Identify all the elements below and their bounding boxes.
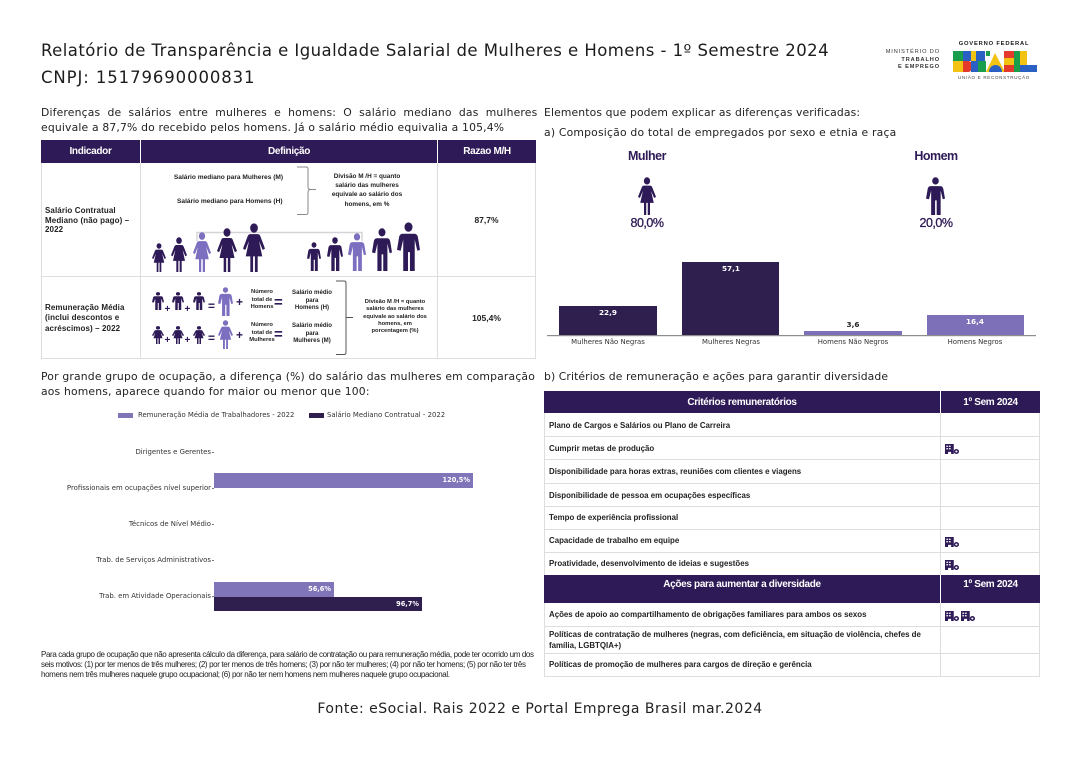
logo: governo federal: UNIÃO E RECONSTRUÇÃO (958, 75, 1030, 80)
logo: ministério: MINISTÉRIO DO (886, 49, 940, 55)
bar: Mulheres Negras: 57,1 (722, 264, 740, 273)
value: 20,0%: 20,0% (920, 216, 952, 230)
value: 87,7%: 87,7% (474, 215, 499, 225)
icon: mulher (638, 177, 656, 215)
text: divisão M/H porcentagem: porcentagem (%) (371, 328, 419, 334)
legend: Salário Mediano Contratual - 2022 (327, 411, 445, 419)
text: diferenças de salários: equivale a 87,7% do recebido pelos homens. Já o salário médio equivalia a 105,4% (41, 121, 504, 134)
label: homem: Homem (914, 149, 958, 163)
text: diferenças de salários: Diferenças de salários entre mulheres e homens: O salário mediano das mulheres (41, 106, 537, 119)
bar: Homens Não Negros: 3,6 (847, 320, 859, 329)
header: critérios: Critérios remuneratórios (687, 396, 797, 408)
row label: salário contratual: 2022 (45, 225, 63, 234)
row: capacidade de trabalho: Capacidade de trabalho em equipe (549, 536, 679, 545)
row label: salário contratual: Mediano (não pago) – (45, 216, 129, 225)
text: divisão M/H porcentagem: homens, em (378, 321, 412, 327)
equals 1: = (274, 294, 283, 311)
icons: soma homens: = (208, 299, 215, 313)
row: cumprir metas: Cumprir metas de produção (549, 444, 654, 453)
logo: ministério: E EMPREGO (898, 64, 940, 70)
bar chart: grupos de ocupação (67, 448, 473, 611)
value: 105,4%: 105,4% (472, 313, 501, 323)
text: número total de mulheres: Número (251, 322, 273, 328)
logo: governo federal: GOVERNO FEDERAL (959, 41, 1029, 47)
heading: a) composição: a) Composição do total de empregados por sexo e etnia e raça (544, 126, 896, 139)
axis labels: Homens Negros (948, 338, 1003, 346)
row label: salário contratual: Salário Contratual (45, 206, 116, 215)
label: mulher: Mulher (628, 149, 666, 163)
axis labels: Homens Não Negros (818, 338, 889, 346)
bar: Homens Negros: 16,4 (966, 317, 984, 326)
equals 2: = (274, 326, 283, 343)
row: tempo de experiência: Tempo de experiência profissional (549, 513, 678, 522)
icons: soma homens: + (184, 304, 190, 315)
bar: 56,6%: 56,6% (308, 585, 331, 593)
title: Relatório de Transparência e Igualdade Salarial de Mulheres e Homens - 1º Semestre 2024 (41, 41, 829, 60)
text: divisão M/H porcentagem: Divisão M /H = quanto (365, 299, 425, 305)
icons: soma homens (152, 287, 243, 316)
footnote: homens nem três mulheres naquele grupo ocupacional; (6) por não ter nem homens nem mulheres naquele grupo ocupacional. (41, 670, 450, 679)
icons: soma mulheres: + (164, 335, 170, 346)
title (41, 41, 829, 87)
table header: Razao M/H (463, 146, 511, 157)
bar chart: grupos de ocupação: Trab. em Atividade Operacionais (99, 592, 211, 600)
row: políticas de contratação (549, 630, 921, 650)
text: número total de mulheres: total de (252, 330, 272, 336)
header: ações: 1º Sem 2024 (963, 579, 1018, 590)
icon: empresa (945, 537, 959, 547)
bar chart: grupos de ocupação: Trab. de Serviços Administrativos (96, 556, 211, 564)
title: CNPJ: 15179690000831 (41, 68, 255, 87)
text: por grande grupo de ocupação (41, 370, 535, 398)
text: divisão M/H (332, 173, 402, 208)
row: proatividade: Proatividade, desenvolvimento de ideias e sugestões (549, 559, 749, 568)
axis labels: Mulheres Negras (702, 338, 760, 346)
legend: Remuneração Média de Trabalhadores - 2022 (138, 411, 294, 419)
row label: salário contratual (45, 206, 129, 234)
bar: Homens Não Negros (804, 320, 902, 336)
heading: b) critérios: b) Critérios de remuneração e ações para garantir diversidade (544, 370, 888, 383)
bar: Mulheres Não Negras (559, 306, 657, 336)
text: diferenças de salários (41, 106, 537, 134)
table header: Definição (268, 146, 310, 157)
text: por grande grupo de ocupação: Por grande grupo de ocupação, a diferença (%) do salário das mulheres em comparação (41, 370, 535, 383)
icons: soma mulheres: + (236, 328, 243, 342)
text: divisão M/H porcentagem: salário das mulheres (366, 306, 424, 312)
value: 80,0%: 80,0% (631, 216, 663, 230)
brace 1 (297, 166, 316, 215)
text: divisão M/H: homens, em % (345, 201, 389, 208)
text: divisão M/H porcentagem (363, 299, 427, 334)
icons: homens (307, 222, 420, 271)
row: políticas de contratação: família, LGBTQIA+) (549, 640, 621, 650)
row: políticas de promoção: Políticas de promoção de mulheres para cargos de direção e gerência (549, 660, 812, 669)
text: número total de homens: Homens (251, 304, 273, 310)
logo: governo federal (953, 41, 1037, 80)
text: número total de mulheres: Mulheres (249, 337, 275, 343)
row label: remuneração média: acréscimos) – 2022 (45, 324, 120, 333)
icon: empresa (945, 444, 959, 454)
panel: tabela de indicadores (41, 140, 536, 359)
heading: elementos: Elementos que podem explicar as diferenças verificadas: (544, 106, 860, 119)
fonte: Fonte: eSocial. Rais 2022 e Portal Emprega Brasil mar.2024 (317, 701, 763, 717)
row label: remuneração média (45, 303, 125, 333)
icon: homem (926, 177, 945, 215)
text: número total de homens (251, 289, 274, 310)
icons: empresa dupla (945, 611, 975, 621)
table header: Indicador (69, 146, 112, 157)
row: ações de apoio: Ações de apoio ao compartilhamento de obrigações familiares para ambos os sexos (549, 610, 866, 619)
text: salário médio mulheres: Salário médio (292, 322, 332, 329)
text: divisão M/H porcentagem: equivale ao salário dos (363, 314, 427, 320)
footnote (41, 650, 534, 679)
axis labels (571, 338, 1003, 346)
icon: empresa (945, 560, 959, 570)
row label: remuneração média: (inclui descontos e (45, 313, 119, 322)
text: divisão M/H: Divisão M /H = quanto (334, 173, 400, 180)
footnote: seis motivos: (1) por ter menos de três mulheres; (2) por ter menos de três homens; (3) por não ter mulheres; (4) por não ter homens; (5) por não ter três (41, 660, 526, 669)
header: ações (544, 575, 1040, 603)
axis labels: Mulheres Não Negras (571, 338, 645, 346)
row: políticas de contratação: Políticas de contratação de mulheres (negras, com deficiência, em situação de violência, chefes de (549, 630, 921, 639)
panel: critérios e ações (544, 391, 1040, 677)
header: critérios (544, 391, 1040, 413)
bar chart: empregados por sexo e raça (547, 262, 1036, 346)
row: disponibilidade horas extras: Disponibilidade para horas extras, reuniões com clientes e viagens (549, 467, 801, 476)
bar: 120,5%: 120,5% (443, 476, 470, 484)
footnote: Para cada grupo de ocupação que não apresenta cálculo da diferença, para salário de contratação ou para remuneração média, pode ter ocorrido um dos (41, 650, 534, 659)
icons: soma mulheres: + (184, 335, 190, 346)
label: salário mediano homens: Salário mediano para Homens (H) (177, 198, 283, 205)
bar: Homens Negros (927, 315, 1024, 336)
bar: Mulheres Negras (682, 262, 779, 336)
icons: soma homens: + (236, 295, 243, 309)
icons: soma mulheres: = (208, 331, 215, 345)
text: salário médio homens: Homens (H) (295, 304, 329, 311)
bar: 120,5% (214, 473, 473, 488)
logo: ministério (886, 48, 940, 70)
header: critérios: 1º Sem 2024 (963, 396, 1018, 408)
bar: 96,7%: 96,7% (396, 600, 419, 608)
header: ações: Ações para aumentar a diversidade (663, 579, 821, 590)
bar: Mulheres Não Negras: 22,9 (599, 308, 617, 317)
text: por grande grupo de ocupação: aos homens, aparece quando for maior ou menor que 100: (41, 385, 370, 398)
icons: soma mulheres (152, 320, 243, 349)
brace 2 (336, 280, 353, 355)
row: plano de cargos: Plano de Cargos e Salários ou Plano de Carreira (549, 421, 730, 430)
text: divisão M/H: equivale ao salário dos (332, 191, 402, 198)
text: salário médio homens: Salário médio (292, 289, 332, 296)
logo: ministério: TRABALHO (901, 56, 940, 62)
bar: 56,6% (214, 582, 334, 597)
bar chart: grupos de ocupação: Técnicos de Nível Médio (129, 520, 211, 528)
text: salário médio homens: para (306, 297, 318, 304)
icons: soma homens: + (164, 304, 170, 315)
row label: remuneração média: Remuneração Média (45, 303, 125, 312)
text: número total de homens: Número (251, 289, 273, 295)
category labels: Dirigentes e Gerentes (136, 448, 211, 456)
text: salário médio mulheres: para (306, 330, 318, 337)
row: disponibilidade de pessoa: Disponibilidade de pessoa em ocupações específicas (549, 491, 750, 500)
text: salário médio mulheres: Mulheres (M) (293, 337, 331, 344)
bar: 96,7% (214, 597, 422, 611)
text: número total de mulheres (249, 322, 275, 343)
bar chart: grupos de ocupação: Profissionais em ocupações nível superior (67, 484, 211, 492)
icons: mulheres (152, 223, 265, 272)
text: divisão M/H: salário das mulheres (335, 182, 399, 189)
text: número total de homens: total de (252, 297, 272, 303)
text: salário médio homens (292, 289, 332, 311)
connector line (196, 232, 363, 241)
label: salário mediano mulheres: Salário mediano para Mulheres (M) (174, 174, 283, 181)
legend (118, 411, 445, 419)
table header (41, 140, 536, 163)
text: salário médio mulheres (292, 322, 332, 344)
